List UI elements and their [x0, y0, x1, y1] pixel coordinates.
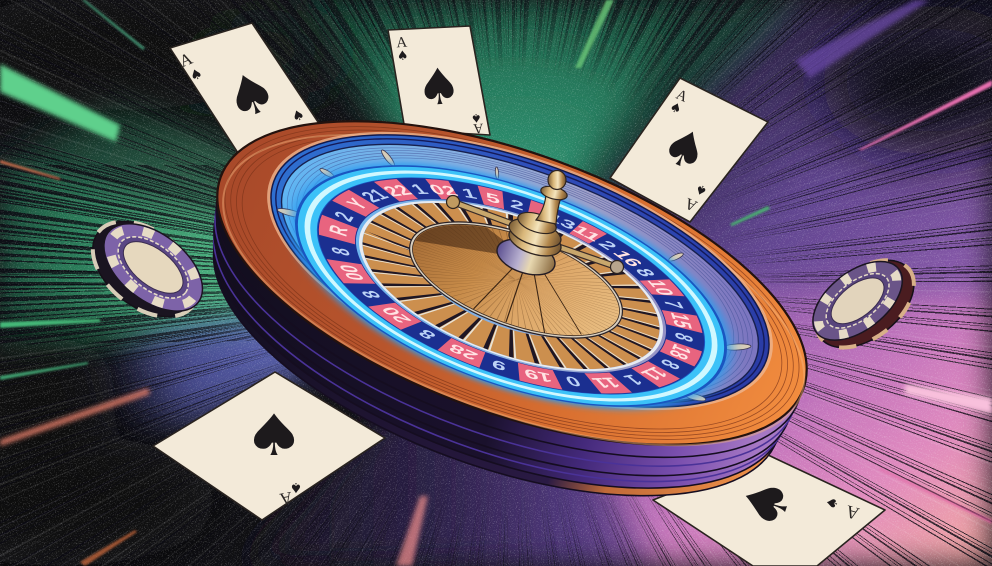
card suit lower: ♠ [470, 111, 482, 125]
chip centre [115, 232, 192, 303]
card index A: A [396, 35, 408, 51]
hub neck [536, 194, 561, 224]
pocket numbers: 20 [378, 305, 416, 324]
pocket numbers: 13 [544, 211, 578, 232]
card: top centre ace of spades [388, 26, 490, 135]
pink pockets [229, 92, 793, 480]
pocket numbers: 11 [587, 374, 624, 390]
pocket numbers: 8 [415, 327, 440, 341]
chip: right poker chip [799, 241, 930, 365]
card index A: A [673, 87, 690, 106]
card index A: A [278, 488, 294, 509]
pocket numbers: 22 [379, 182, 417, 200]
pocket numbers: 11 [635, 363, 672, 383]
hub collar [539, 184, 569, 202]
card index A: A [177, 49, 196, 71]
chip face [88, 206, 218, 329]
chip edge [75, 202, 216, 336]
card suit small: ♠ [188, 66, 205, 85]
card suit centre: ♠ [414, 57, 463, 118]
pocket numbers: 16 [608, 249, 646, 268]
pocket numbers: 2 [510, 197, 524, 214]
chip centre [823, 269, 892, 333]
card suit centre: ♠ [216, 56, 287, 135]
chip edge [800, 243, 930, 365]
pocket numbers: 11 [569, 223, 604, 244]
card index lower A: A [682, 194, 700, 214]
pocket numbers: 8 [327, 245, 356, 258]
hub right arm [556, 246, 624, 274]
card suit lower: ♠ [290, 107, 307, 126]
hub: brass spindle and turret [446, 170, 624, 281]
pocket numbers: 7 [657, 299, 688, 310]
wheel: wooden rim [176, 55, 848, 511]
chip face [799, 246, 916, 356]
pocket numbers: R [325, 222, 354, 239]
wheel: track diamonds [277, 149, 751, 403]
card index A: A [843, 501, 861, 524]
card suit small: ♠ [290, 479, 302, 495]
card suit centre: ♠ [727, 468, 807, 538]
pocket numbers [299, 140, 724, 433]
card: bottom right ace of spades [653, 455, 885, 566]
wheel: body under the rim [173, 68, 843, 560]
wheel: ball track [249, 91, 791, 455]
card suit centre: ♠ [653, 114, 717, 185]
card suit lower: ♠ [693, 180, 710, 198]
card: top left ace of spades [170, 23, 322, 156]
chip: left poker chip [75, 201, 218, 337]
wooden fret ring [374, 192, 648, 380]
pocket numbers: 9 [491, 356, 507, 373]
card: top right ace of spades [610, 78, 768, 222]
pocket numbers: 5 [485, 190, 501, 207]
hub lower ring [505, 220, 565, 262]
pocket numbers: 1 [407, 182, 433, 197]
pocket numbers: 15 [665, 311, 696, 330]
pocket numbers: 0 [561, 373, 584, 389]
card suit small: ♠ [396, 49, 409, 64]
pocket numbers: 8 [654, 355, 685, 372]
pocket numbers: 21 [356, 186, 395, 206]
neon ring [278, 126, 744, 446]
wheel: wooden centre cone [395, 198, 637, 362]
hub mid ring [515, 208, 559, 238]
wheel: blue inner band [232, 75, 808, 467]
pocket numbers: 10 [641, 280, 679, 295]
pocket numbers: 02 [426, 182, 462, 199]
hub finial [548, 170, 566, 190]
pocket numbers: Y [342, 195, 374, 213]
hub left arm [446, 196, 518, 226]
pocket numbers: 8 [669, 330, 697, 344]
pocket numbers: 1 [459, 186, 479, 202]
pocket numbers: 1 [618, 371, 647, 388]
pocket numbers: 8 [630, 268, 659, 277]
card suit small: ♠ [824, 496, 842, 511]
card: bottom left ace of spades [153, 372, 385, 520]
pocket numbers: 2 [330, 209, 360, 225]
cone grain rays [400, 206, 605, 348]
pocket numbers: 19 [522, 365, 554, 385]
card suit small: ♠ [667, 100, 684, 118]
card suit centre: ♠ [243, 402, 305, 469]
pocket numbers: 18 [663, 341, 695, 362]
pocket numbers: 2 [594, 239, 620, 252]
card index lower A: A [472, 120, 484, 135]
pocket numbers: 28 [447, 341, 481, 362]
hub base [493, 233, 559, 281]
pocket numbers: 8 [357, 290, 387, 299]
pocket numbers: 00 [335, 264, 371, 281]
wheel: numbered pocket ring [229, 92, 793, 480]
